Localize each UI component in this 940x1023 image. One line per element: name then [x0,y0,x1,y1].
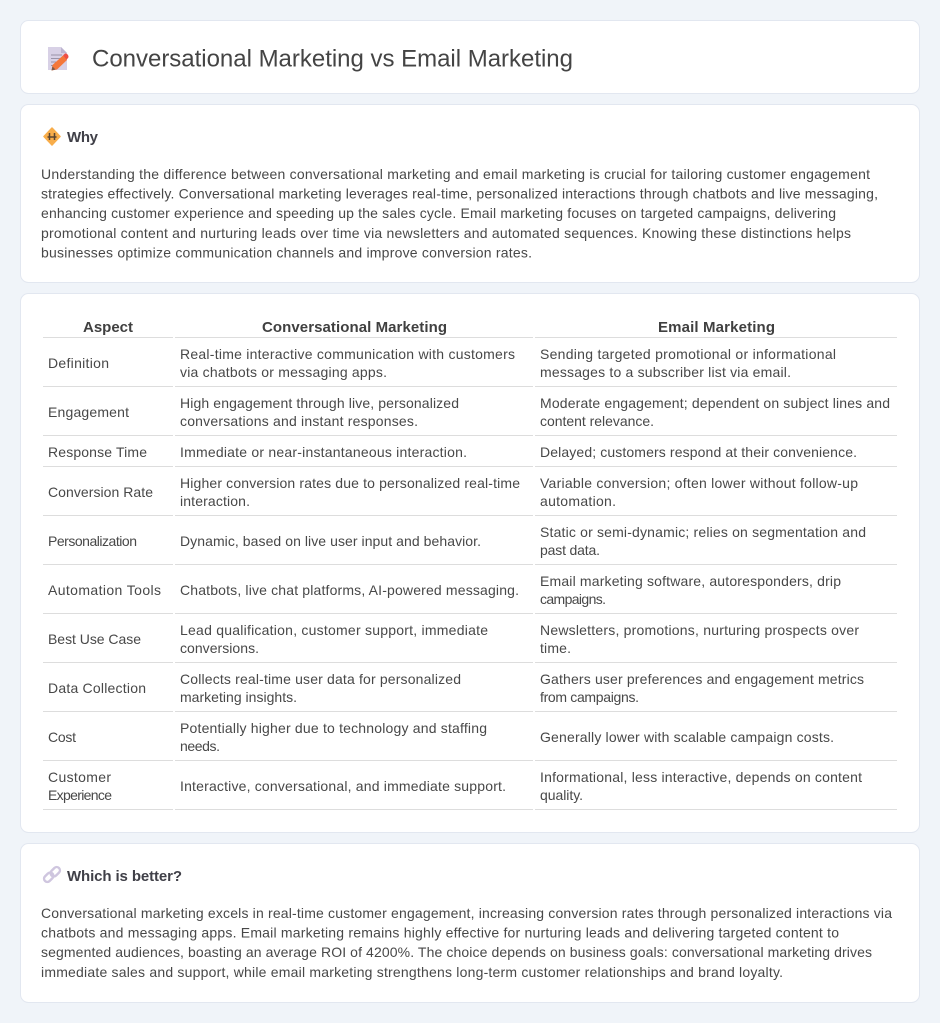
row: definition: Sending targeted promotional or informational [540,346,836,362]
row: personalization: Static or semi-dynamic; relies on segmentation and [540,524,866,540]
table header row [43,319,897,338]
row: automation tools: Email marketing software, autoresponders, drip [540,573,841,589]
row: data collection [43,671,897,712]
row: customer experience: Interactive, conversational, and immediate support. [180,778,506,794]
row: customer experience: Informational, less interactive, depends on content [540,769,862,785]
row: conversion rate: automation. [540,493,616,509]
row: personalization: past data. [540,542,600,558]
row: personalization: Personalization [48,533,137,549]
row: conversion rate: Higher conversion rates due to personalized real-time [180,475,520,491]
row: best use case: Best Use Case [48,631,141,647]
row: automation tools [43,573,897,614]
row: conversion rate [43,475,897,516]
row: personalization: Dynamic, based on live user input and behavior. [180,533,481,549]
row: engagement: content relevance. [540,413,654,429]
text block: why paragraph: strategies effectively. Conversational marketing leverages real-time, personalized interactions through chatbots and live messaging, [41,186,878,202]
row: response time [43,444,897,467]
panel: comparison table [20,294,920,832]
row: data collection: Gathers user preferences and engagement metrics [540,671,864,687]
row: definition: Definition [48,355,109,371]
row: best use case: time. [540,640,571,656]
row: data collection: Data Collection [48,680,146,696]
row: cost: Generally lower with scalable campaign costs. [540,729,834,745]
row: best use case: Lead qualification, customer support, immediate [180,622,488,638]
row: customer experience: quality. [540,787,583,803]
text block: which is better paragraph: chatbots and messaging apps. Email marketing remains highly effective for nurturing leads and delivering targeted content to [41,925,839,941]
row: automation tools: Automation Tools [48,582,161,598]
row: cost: Cost [48,729,76,745]
row: best use case: Newsletters, promotions, nurturing prospects over [540,622,859,638]
panel: why [20,104,920,282]
row: response time: Immediate or near-instantaneous interaction. [180,444,467,460]
icon: orange diamond sign [44,128,60,145]
row: customer experience: Customer [48,769,111,785]
row: engagement: High engagement through live, personalized [180,395,459,411]
row: engagement: conversations and instant responses. [180,413,418,429]
row: conversion rate: Variable conversion; often lower without follow-up [540,475,858,491]
row: data collection: Collects real-time user data for personalized [180,671,461,687]
table header row: Email Marketing [658,319,775,336]
heading: which is better: Which is better? [67,868,182,885]
row: cost [43,720,897,761]
row: conversion rate: interaction. [180,493,250,509]
row: response time: Response Time [48,444,147,460]
row: definition: Real-time interactive communication with customers [180,346,515,362]
row: conversion rate: Conversion Rate [48,484,153,500]
text block: why paragraph [41,166,878,260]
row: response time: Delayed; customers respond at their convenience. [540,444,857,460]
table header row: Conversational Marketing [262,319,447,336]
row: automation tools: campaigns. [540,591,606,607]
row: customer experience: Experience [48,787,112,803]
row: definition: messages to a subscriber list via email. [540,364,791,380]
row: automation tools: Chatbots, live chat platforms, AI-powered messaging. [180,582,519,598]
row: best use case [43,622,897,663]
row: personalization [43,524,897,565]
row: cost: Potentially higher due to technology and staffing [180,720,487,736]
row: definition: via chatbots or messaging apps. [180,364,387,380]
text block: why paragraph: enhancing customer experience and speeding up the sales cycle. Email marketing focuses on targeted campaigns, delivering [41,205,836,221]
row: customer experience [43,769,897,810]
row: engagement: Moderate engagement; dependent on subject lines and [540,395,890,411]
icon: chain link [43,866,61,883]
text block: which is better paragraph: immediate sales and support, while email marketing strengthens long-term customer relationships and brand loyalty. [41,964,783,980]
row: best use case: conversions. [180,640,259,656]
row: cost: needs. [180,738,220,754]
text block: why paragraph: Understanding the difference between conversational marketing and email marketing is crucial for tailoring customer engagement [41,166,870,182]
title: Conversational Marketing vs Email Marketing [92,46,573,72]
table header row: Aspect [83,319,133,336]
row: data collection: marketing insights. [180,689,297,705]
row: engagement [43,395,897,436]
panel: title header [20,20,920,94]
row: data collection: from campaigns. [540,689,639,705]
text block: which is better paragraph: segmented audiences, boasting an average ROI of 4200%. The choice depends on business goals: conversational marketing drives [41,944,872,960]
text block: which is better paragraph: Conversational marketing excels in real-time customer engagement, increasing conversion rates through personalized interactions via [41,905,892,921]
row: engagement: Engagement [48,404,129,420]
text block: why paragraph: businesses optimize communication channels and improve conversion rates. [41,244,532,260]
row: definition [43,346,897,387]
text block: why paragraph: promotional content and nurturing leads over time via newsletters and automated sequences. Knowing these distinctions helps [41,225,851,241]
text block: which is better paragraph [41,905,892,980]
panel: which is better [20,844,920,1002]
icon: document with pencil [48,47,68,70]
heading: why: Why [67,129,99,146]
